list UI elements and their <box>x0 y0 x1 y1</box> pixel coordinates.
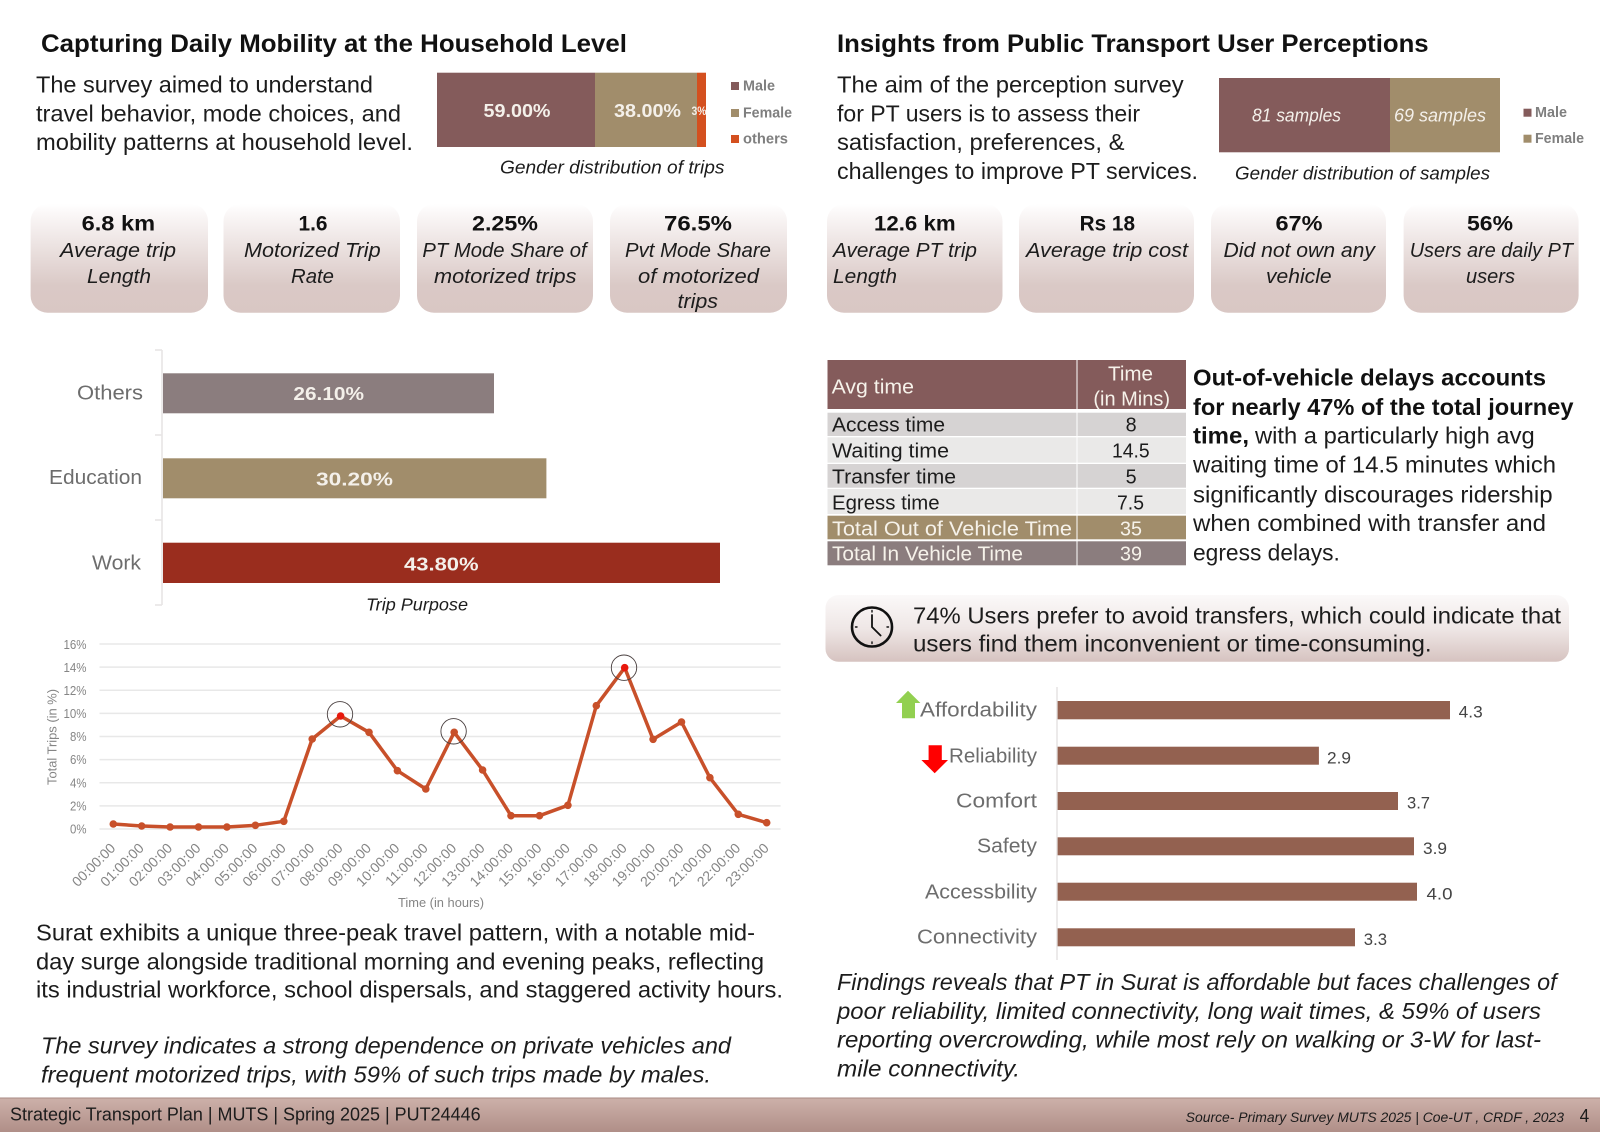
bar chart: PT satisfaction ratings: Safety <box>977 836 1037 858</box>
bar chart: PT satisfaction ratings: Accessbility <box>925 881 1037 903</box>
line chart: hourly trip distribution: 21:00:00 <box>665 840 715 890</box>
line chart: hourly trip distribution: 02:00:00 <box>125 840 175 890</box>
chart: gender distribution of samples: 81 samples <box>1252 104 1341 126</box>
caption: trip purpose: Trip Purpose <box>366 595 468 615</box>
line chart: hourly trip distribution: 18:00:00 <box>580 840 630 890</box>
table: average journey time: Total Out of Vehicle Time <box>832 519 1072 541</box>
card: average PT trip length <box>827 204 1002 313</box>
text block: three-peak travel pattern: day surge alongside traditional morning and evening peaks, reflecting <box>36 948 764 974</box>
card: average trip cost: Rs 18 <box>1080 212 1135 236</box>
card: average PT trip length: Average PT trip <box>832 240 977 262</box>
bar chart: PT satisfaction ratings: 4.3 <box>1459 703 1483 722</box>
footer bar: Strategic Transport Plan | MUTS | Spring 2025 | PUT24446 <box>10 1104 481 1124</box>
text block: household survey aim: travel behavior, mode choices, and <box>36 101 401 127</box>
line chart: hourly trip distribution: 4% <box>70 776 86 790</box>
table: average journey time: Egress time <box>832 492 940 514</box>
card: average PT trip length: 12.6 km <box>874 212 956 236</box>
text block: household survey aim: The survey aimed to understand <box>36 72 373 98</box>
line chart: hourly trip distribution: 09:00:00 <box>324 840 374 890</box>
bar chart: trip purpose: 30.20% <box>316 469 393 490</box>
bar chart: PT satisfaction ratings: Affordability <box>920 700 1037 722</box>
card: average trip cost: Average trip cost <box>1025 240 1190 262</box>
text block: out-of-vehicle delays: egress delays. <box>1193 540 1340 566</box>
heading: public transport perceptions: Insights from Public Transport User Perceptions <box>837 30 1429 58</box>
callout: transfer preference <box>826 595 1569 662</box>
text block: findings <box>836 969 1559 1082</box>
bar chart: PT satisfaction ratings: Connectivity <box>917 926 1037 948</box>
table: average journey time: Transfer time <box>832 466 956 488</box>
line chart: hourly trip distribution: Total Trips (in %) <box>46 689 60 785</box>
icon: red down arrow <box>921 745 948 773</box>
heading: household mobility: Capturing Daily Mobility at the Household Level <box>41 30 627 58</box>
card: average trip cost <box>1019 204 1194 313</box>
card: daily PT users: Users are daily PT <box>1410 240 1575 262</box>
chart: gender distribution of samples: 69 samples <box>1394 104 1486 126</box>
text block: findings: poor reliability, limited connectivity, long wait times, & 59% of users <box>836 998 1541 1024</box>
bar chart: trip purpose: 43.80% <box>404 554 479 575</box>
line chart: hourly trip distribution: 06:00:00 <box>239 840 289 890</box>
table: average journey time: Waiting time <box>832 441 949 463</box>
line chart: hourly trip distribution: 04:00:00 <box>182 840 232 890</box>
card: PT mode share: motorized trips <box>434 266 576 288</box>
card: daily PT users: users <box>1466 266 1515 288</box>
table: average journey time: 35 <box>1120 519 1142 541</box>
text block: out-of-vehicle delays <box>1192 365 1574 566</box>
chart: gender distribution of trips: Male <box>743 78 775 94</box>
callout: transfer preference: 74% Users prefer to avoid transfers, which could indicate that <box>913 602 1561 628</box>
line chart: hourly trip distribution: 10% <box>64 707 86 721</box>
card: did not own vehicle: vehicle <box>1266 266 1332 288</box>
card: PT mode share <box>417 204 593 313</box>
line chart: hourly trip distribution: 23:00:00 <box>722 840 772 890</box>
text block: out-of-vehicle delays: with a particularly high avg <box>1254 422 1535 448</box>
chart: gender distribution of trips: 38.00% <box>614 100 681 121</box>
bar chart: PT satisfaction ratings: Reliability <box>949 745 1037 767</box>
line chart: hourly trip distribution: Time (in hours) <box>398 896 484 910</box>
caption: gender distribution of trips: Gender distribution of trips <box>500 158 724 178</box>
line chart: hourly trip distribution: 12:00:00 <box>409 840 459 890</box>
text block: household survey aim <box>36 72 413 155</box>
line chart: hourly trip distribution: 15:00:00 <box>495 840 545 890</box>
text block: findings: reporting overcrowding, while most rely on walking or 3-W for last- <box>837 1027 1541 1053</box>
text block: out-of-vehicle delays: waiting time of 14.5 minutes which <box>1192 452 1556 478</box>
text block: findings: Findings reveals that PT in Surat is affordable but faces challenges of <box>837 969 1559 995</box>
line chart: hourly trip distribution: 08:00:00 <box>296 840 346 890</box>
line chart: hourly trip distribution: 05:00:00 <box>211 840 261 890</box>
chart: gender distribution of samples: Female <box>1535 131 1584 147</box>
card: motorized trip rate: Motorized Trip <box>244 240 381 262</box>
text block: perception survey aim: satisfaction, preferences, & <box>837 129 1125 155</box>
chart: gender distribution of trips <box>437 73 792 148</box>
line chart: hourly trip distribution: 20:00:00 <box>637 840 687 890</box>
line chart: hourly trip distribution: 22:00:00 <box>694 840 744 890</box>
line chart: hourly trip distribution: 12% <box>64 684 86 698</box>
text block: three-peak travel pattern <box>36 920 783 1003</box>
bar chart: PT satisfaction ratings: 2.9 <box>1327 748 1351 767</box>
text block: perception survey aim <box>837 72 1198 184</box>
card: motorized trip rate: 1.6 <box>298 212 328 236</box>
text block: dependence on private vehicles <box>41 1032 732 1087</box>
bar chart: trip purpose <box>49 350 720 605</box>
card: private mode share: of motorized <box>638 266 760 288</box>
line chart: hourly trip distribution: 17:00:00 <box>552 840 602 890</box>
line chart: hourly trip distribution: 03:00:00 <box>154 840 204 890</box>
table: average journey time: Avg time <box>832 376 914 398</box>
card: did not own vehicle: Did not own any <box>1224 240 1376 262</box>
text block: out-of-vehicle delays: time, <box>1193 422 1249 448</box>
table: average journey time: Total In Vehicle Time <box>832 544 1023 566</box>
card: average trip length: Average trip <box>59 240 176 262</box>
chart: gender distribution of trips: 59.00% <box>484 100 550 121</box>
card: daily PT users: 56% <box>1467 212 1513 236</box>
line chart: hourly trip distribution: 13:00:00 <box>438 840 488 890</box>
chart: gender distribution of trips: others <box>743 132 788 148</box>
card: average trip length <box>31 204 208 313</box>
text block: out-of-vehicle delays: significantly discourages ridership <box>1193 481 1553 507</box>
bar chart: PT satisfaction ratings: Comfort <box>956 790 1038 812</box>
text block: dependence on private vehicles: The survey indicates a strong dependence on private vehicles and <box>41 1032 732 1058</box>
bar chart: trip purpose: Education <box>49 467 142 489</box>
bar chart: trip purpose: Others <box>77 382 143 404</box>
line chart: hourly trip distribution: 00:00:00 <box>69 840 119 890</box>
line chart: hourly trip distribution: 0% <box>70 822 86 836</box>
text block: out-of-vehicle delays: for nearly 47% of the total journey <box>1193 394 1574 420</box>
text block: household survey aim: mobility patterns at household level. <box>36 129 413 155</box>
bar chart: trip purpose: Work <box>92 552 142 574</box>
chart: gender distribution of samples: Male <box>1535 105 1567 121</box>
chart: gender distribution of samples <box>1219 78 1584 152</box>
callout: transfer preference: users find them inconvenient or time-consuming. <box>913 631 1432 657</box>
line chart: hourly trip distribution: 14:00:00 <box>466 840 516 890</box>
text block: out-of-vehicle delays: Out-of-vehicle delays accounts <box>1193 365 1546 391</box>
card: private mode share: Pvt Mode Share <box>625 240 771 262</box>
table: average journey time: 7.5 <box>1117 492 1144 514</box>
text block: perception survey aim: challenges to improve PT services. <box>837 158 1198 184</box>
line chart: hourly trip distribution <box>46 638 781 910</box>
card: private mode share <box>610 204 787 313</box>
bar chart: PT satisfaction ratings: 4.0 <box>1426 884 1452 903</box>
card: motorized trip rate: Rate <box>291 266 334 288</box>
card: PT mode share: 2.25% <box>472 212 538 236</box>
line chart: hourly trip distribution: 8% <box>70 730 86 744</box>
line chart: hourly trip distribution: 10:00:00 <box>353 840 403 890</box>
text block: perception survey aim: The aim of the perception survey <box>837 72 1184 98</box>
table: average journey time: 8 <box>1126 415 1137 437</box>
text block: findings: mile connectivity. <box>837 1056 1020 1082</box>
table: average journey time: Access time <box>832 415 945 437</box>
chart: gender distribution of trips: Female <box>743 106 792 122</box>
table: average journey time <box>828 360 1186 566</box>
line chart: hourly trip distribution: 6% <box>70 753 86 767</box>
card: did not own vehicle <box>1211 204 1386 313</box>
text block: perception survey aim: for PT users is to assess their <box>837 101 1140 127</box>
line chart: hourly trip distribution: 16:00:00 <box>523 840 573 890</box>
chart: gender distribution of trips: 3% <box>692 106 706 118</box>
footer bar: 4 <box>1580 1106 1589 1126</box>
line chart: hourly trip distribution: 11:00:00 <box>382 840 431 889</box>
text block: three-peak travel pattern: its industrial workforce, school dispersals, and staggered activity hours. <box>36 977 783 1003</box>
bar chart: PT satisfaction ratings: 3.7 <box>1407 793 1430 812</box>
line chart: hourly trip distribution: 07:00:00 <box>267 840 317 890</box>
text block: three-peak travel pattern: Surat exhibits a unique three-peak travel pattern, with a notable mid- <box>36 920 755 946</box>
bar chart: trip purpose: 26.10% <box>293 383 364 404</box>
bar chart: PT satisfaction ratings <box>917 687 1483 960</box>
table: average journey time: 14.5 <box>1112 441 1150 463</box>
line chart: hourly trip distribution: 2% <box>70 800 86 814</box>
line chart: hourly trip distribution: 14% <box>64 661 86 675</box>
line chart: hourly trip distribution: 19:00:00 <box>608 840 658 890</box>
table: average journey time: 5 <box>1126 466 1137 488</box>
card: average PT trip length: Length <box>833 266 897 288</box>
table: average journey time: 39 <box>1120 544 1142 566</box>
footer bar: Source- Primary Survey MUTS 2025 | Coe-UT , CRDF , 2023 <box>1186 1110 1564 1125</box>
card: daily PT users <box>1404 204 1579 313</box>
card: average trip length: 6.8 km <box>82 212 155 236</box>
card: private mode share: 76.5% <box>664 212 732 236</box>
table: average journey time: (in Mins) <box>1093 389 1170 411</box>
text block: out-of-vehicle delays: when combined with transfer and <box>1192 510 1546 536</box>
icon: clock <box>852 608 892 646</box>
text block: dependence on private vehicles: frequent motorized trips, with 59% of such trips made by males. <box>41 1061 711 1087</box>
line chart: hourly trip distribution: 01:00:00 <box>97 840 147 890</box>
bar chart: PT satisfaction ratings: 3.9 <box>1423 839 1447 858</box>
card: did not own vehicle: 67% <box>1276 212 1323 236</box>
card: private mode share: trips <box>678 291 718 313</box>
bar chart: PT satisfaction ratings: 3.3 <box>1364 930 1387 949</box>
icon: green up arrow <box>896 691 920 718</box>
caption: gender distribution of samples: Gender distribution of samples <box>1235 164 1490 184</box>
card: average trip length: Length <box>87 266 151 288</box>
line chart: hourly trip distribution: 16% <box>64 638 86 652</box>
table: average journey time: Time <box>1108 364 1153 386</box>
footer bar <box>0 1098 1600 1132</box>
card: motorized trip rate <box>224 204 400 313</box>
card: PT mode share: PT Mode Share of <box>422 240 589 262</box>
